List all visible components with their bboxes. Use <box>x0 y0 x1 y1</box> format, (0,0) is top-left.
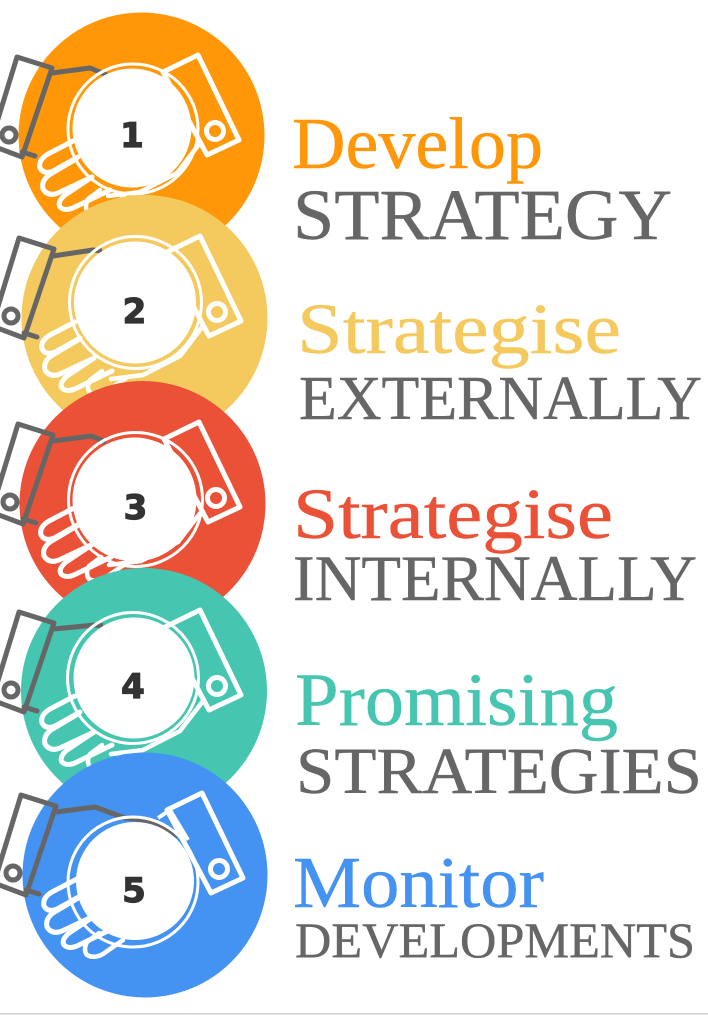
number 5: 5 <box>122 871 146 911</box>
label: Strategise Externally <box>297 289 702 433</box>
label: Strategise Internally <box>293 474 697 615</box>
label: Develop Strategy <box>292 103 672 255</box>
label: Strategise Internally: Strategise <box>293 474 613 554</box>
label: Monitor Developments <box>293 842 695 968</box>
label: Promising Strategies: STRATEGIES <box>296 735 702 808</box>
icon: handshake 5 <box>0 793 243 957</box>
label: Strategise Externally: EXTERNALLY <box>299 365 702 433</box>
label: Promising Strategies <box>295 659 702 808</box>
step 3 circle with handshake icon <box>0 381 266 627</box>
step 5 circle with handshake icon <box>0 752 268 998</box>
number 2: 2 <box>123 292 146 332</box>
label: Monitor Developments: DEVELOPMENTS <box>295 912 695 968</box>
label: Monitor Developments: Monitor <box>293 842 544 923</box>
step 2 circle with handshake icon <box>0 195 268 441</box>
number 3: 3 <box>124 488 147 528</box>
label: Develop Strategy: STRATEGY <box>293 175 672 255</box>
icon: handshake 4 <box>0 610 241 769</box>
label: Strategise Internally: INTERNALLY <box>293 543 697 615</box>
step 4 circle with handshake icon <box>0 568 267 814</box>
label: Strategise Externally: Strategise <box>297 289 621 369</box>
number 4: 4 <box>121 667 145 707</box>
icon: handshake 1 <box>0 55 239 214</box>
label: Promising Strategies: Promising <box>295 659 618 742</box>
icon: handshake 2 <box>0 236 241 395</box>
label: Develop Strategy: Develop <box>292 103 543 184</box>
icon: handshake 3 <box>0 422 240 581</box>
number 1: 1 <box>120 116 144 156</box>
step 1 circle with handshake icon <box>0 12 264 258</box>
